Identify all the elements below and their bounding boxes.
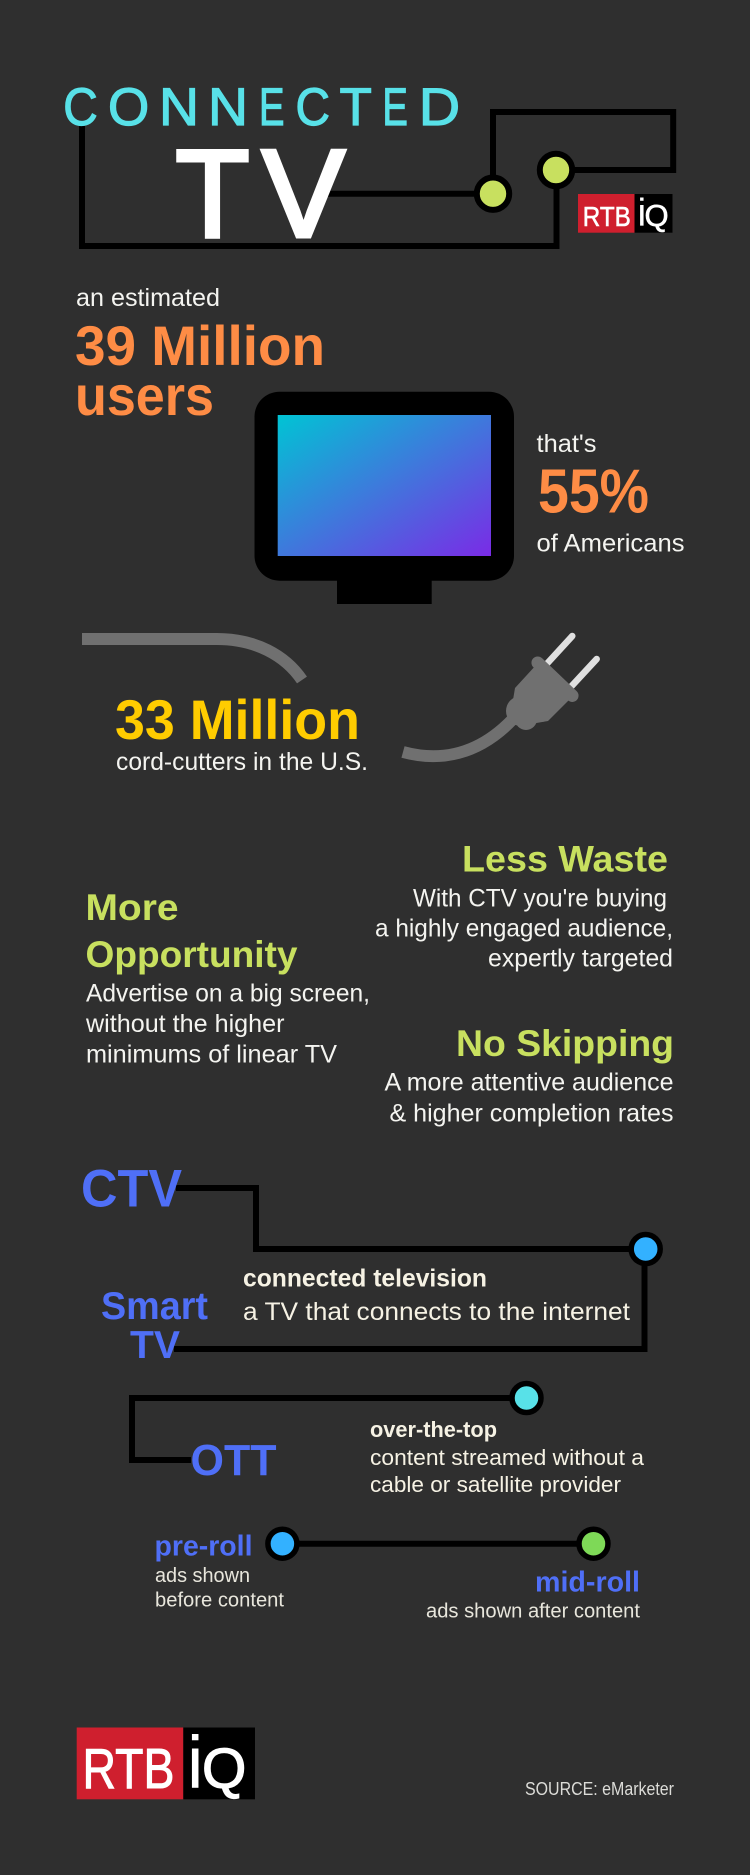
logo: small RTB iQ	[578, 192, 672, 235]
icon: cut cord left	[82, 639, 302, 680]
label: that's: that's	[536, 430, 596, 458]
logo: large RTB iQ: i	[187, 1721, 203, 1804]
word: users: users	[75, 364, 214, 427]
heading: Less Waste: Less Waste	[462, 838, 668, 880]
header: circuit title	[63, 78, 673, 263]
benefit: more opportunity	[85, 886, 370, 1069]
body: less waste: With CTV you're buying	[413, 885, 667, 913]
number: 55%: 55%	[538, 458, 649, 527]
benefit: no skipping	[384, 1022, 674, 1128]
logo: small RTB iQ: RTB	[583, 201, 631, 232]
title: CONNECTED: O	[108, 78, 149, 137]
connector wire	[132, 1398, 526, 1460]
definition: over-the-top: content streamed without a	[370, 1445, 645, 1470]
body: more opportunity: Advertise on a big screen,	[86, 980, 370, 1008]
heading: More Opportunity: More	[86, 886, 178, 928]
term: OTT: OTT	[190, 1437, 277, 1485]
label: of Americans: of Americans	[536, 530, 684, 558]
logo: large RTB iQ: RTB	[82, 1737, 174, 1801]
stat: 39 million users	[75, 284, 325, 427]
stat: 33 million cord-cutters	[115, 688, 368, 776]
glossary: CTV and Smart TV	[81, 1160, 660, 1367]
number: 39 Million: 39 Million	[75, 314, 325, 377]
node: blue	[631, 1234, 660, 1264]
definition: connected television: a TV that connects to the internet	[243, 1298, 630, 1326]
label: an estimated: an estimated	[76, 284, 220, 312]
logo: small RTB iQ: Q	[644, 198, 669, 233]
glossary: ad formats	[154, 1529, 640, 1623]
glossary: OTT	[132, 1384, 645, 1497]
term: mid-roll: mid-roll	[535, 1567, 640, 1599]
node: pre-roll	[268, 1529, 297, 1558]
heading: More Opportunity: Opportunity	[86, 933, 298, 975]
node: right	[540, 154, 572, 186]
definition: mid-roll: ads shown after content	[426, 1601, 640, 1623]
logo: small RTB iQ: i	[638, 192, 646, 235]
node: mid-roll	[579, 1529, 608, 1558]
term: Smart TV: Smart	[101, 1285, 208, 1328]
title: CONNECTED: N	[159, 78, 199, 137]
title: CONNECTED: C	[296, 78, 330, 137]
definition: over-the-top: cable or satellite provider	[370, 1472, 621, 1497]
logo: large RTB iQ	[77, 1721, 255, 1804]
definition: connected television: connected television	[243, 1265, 487, 1293]
title: CONNECTED: E	[259, 78, 284, 137]
benefit: less waste	[375, 838, 673, 973]
node: left	[477, 178, 509, 210]
icon: plug with cord	[403, 636, 597, 756]
definition: pre-roll: before content	[155, 1590, 284, 1612]
heading: No Skipping: No Skipping	[456, 1022, 674, 1064]
source note: SOURCE: eMarketer	[525, 1779, 674, 1799]
title: CONNECTED: D	[419, 78, 460, 137]
node: cyan	[512, 1384, 541, 1412]
connector wire	[174, 1188, 645, 1349]
title: CONNECTED: C	[63, 78, 98, 137]
timeline wire	[282, 1541, 594, 1547]
title: CONNECTED: E	[382, 78, 408, 137]
term: pre-roll: pre-roll	[154, 1531, 252, 1563]
number: 33 Million: 33 Million	[115, 688, 360, 751]
term: CTV: CTV	[81, 1160, 182, 1219]
title: TV: V	[262, 125, 345, 263]
term: Smart TV: TV	[130, 1324, 180, 1367]
body: no skipping: A more attentive audience	[384, 1069, 674, 1097]
title: TV: T	[176, 125, 250, 263]
body: less waste: a highly engaged audience,	[375, 915, 673, 943]
title: CONNECTED: N	[208, 78, 248, 137]
definition: over-the-top: over-the-top	[370, 1417, 497, 1442]
logo: large RTB iQ: Q	[202, 1737, 246, 1801]
body: more opportunity: without the higher	[85, 1010, 284, 1038]
title: CONNECTED: T	[340, 78, 372, 137]
icon: television	[254, 392, 514, 604]
circuit wires	[82, 112, 673, 246]
body: more opportunity: minimums of linear TV	[86, 1041, 337, 1069]
stat: 55% of Americans	[536, 430, 684, 558]
definition: pre-roll: ads shown	[155, 1565, 250, 1587]
label: cord-cutters: cord-cutters in the U.S.	[116, 748, 368, 776]
body: less waste: expertly targeted	[488, 945, 673, 973]
body: no skipping: & higher completion rates	[390, 1100, 674, 1128]
